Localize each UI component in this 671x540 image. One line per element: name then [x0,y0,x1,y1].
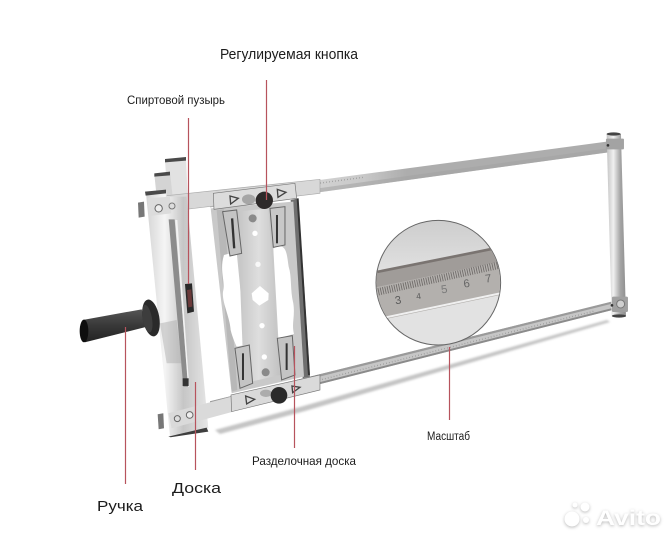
leader: adjustable knob [266,80,268,200]
right frame section [210,132,628,411]
carriage top bar [213,183,297,209]
slot brackets [223,210,242,256]
center plate [237,208,280,383]
carriage side rails [291,198,310,378]
label: scale: Масштаб [427,431,470,443]
label: handle: Ручка [97,498,144,515]
top ruler rail [210,142,608,207]
cutting board carriage [211,183,320,412]
magnifier inset: ruler scale: 3 [394,294,402,307]
magnifier inset: ruler scale: 6 [463,278,471,291]
leader: spirit level [188,118,190,284]
adjustment knobs [242,192,273,209]
red leader lines [126,80,450,484]
carriage bottom bar [231,375,320,412]
product photo: saw guide frame [80,132,628,437]
back boards [154,157,188,210]
handle [80,298,162,342]
magnifier inset: ruler scale: 7 [484,273,492,286]
right end post [606,132,628,318]
watermark: Avito: Avito [596,507,661,530]
leader: board [194,382,196,470]
left clamp details [138,197,233,429]
magnifier inset: ruler scale: 4 [416,291,422,301]
watermark: Avito [564,502,661,530]
leader: scale [448,347,450,420]
spirit level [185,283,194,313]
window cutouts [222,252,245,347]
label: adjustable knob: Регулируемая кнопка [220,46,359,63]
magnifier inset: ruler scale: 5 [440,284,448,296]
floor shadow [215,320,610,434]
label: spirit level: Спиртовой пузырь [127,93,225,107]
leader: handle [124,327,126,484]
leader: cutting board [294,346,296,448]
carriage base [211,202,304,393]
label: board: Доска [172,480,222,497]
label: cutting board: Разделочная доска [252,454,356,468]
top cross rail [167,179,320,212]
bottom ruler rail [210,302,615,411]
front board [145,190,208,437]
left assembly [80,157,320,437]
magnifier inset: ruler scale [373,220,501,345]
